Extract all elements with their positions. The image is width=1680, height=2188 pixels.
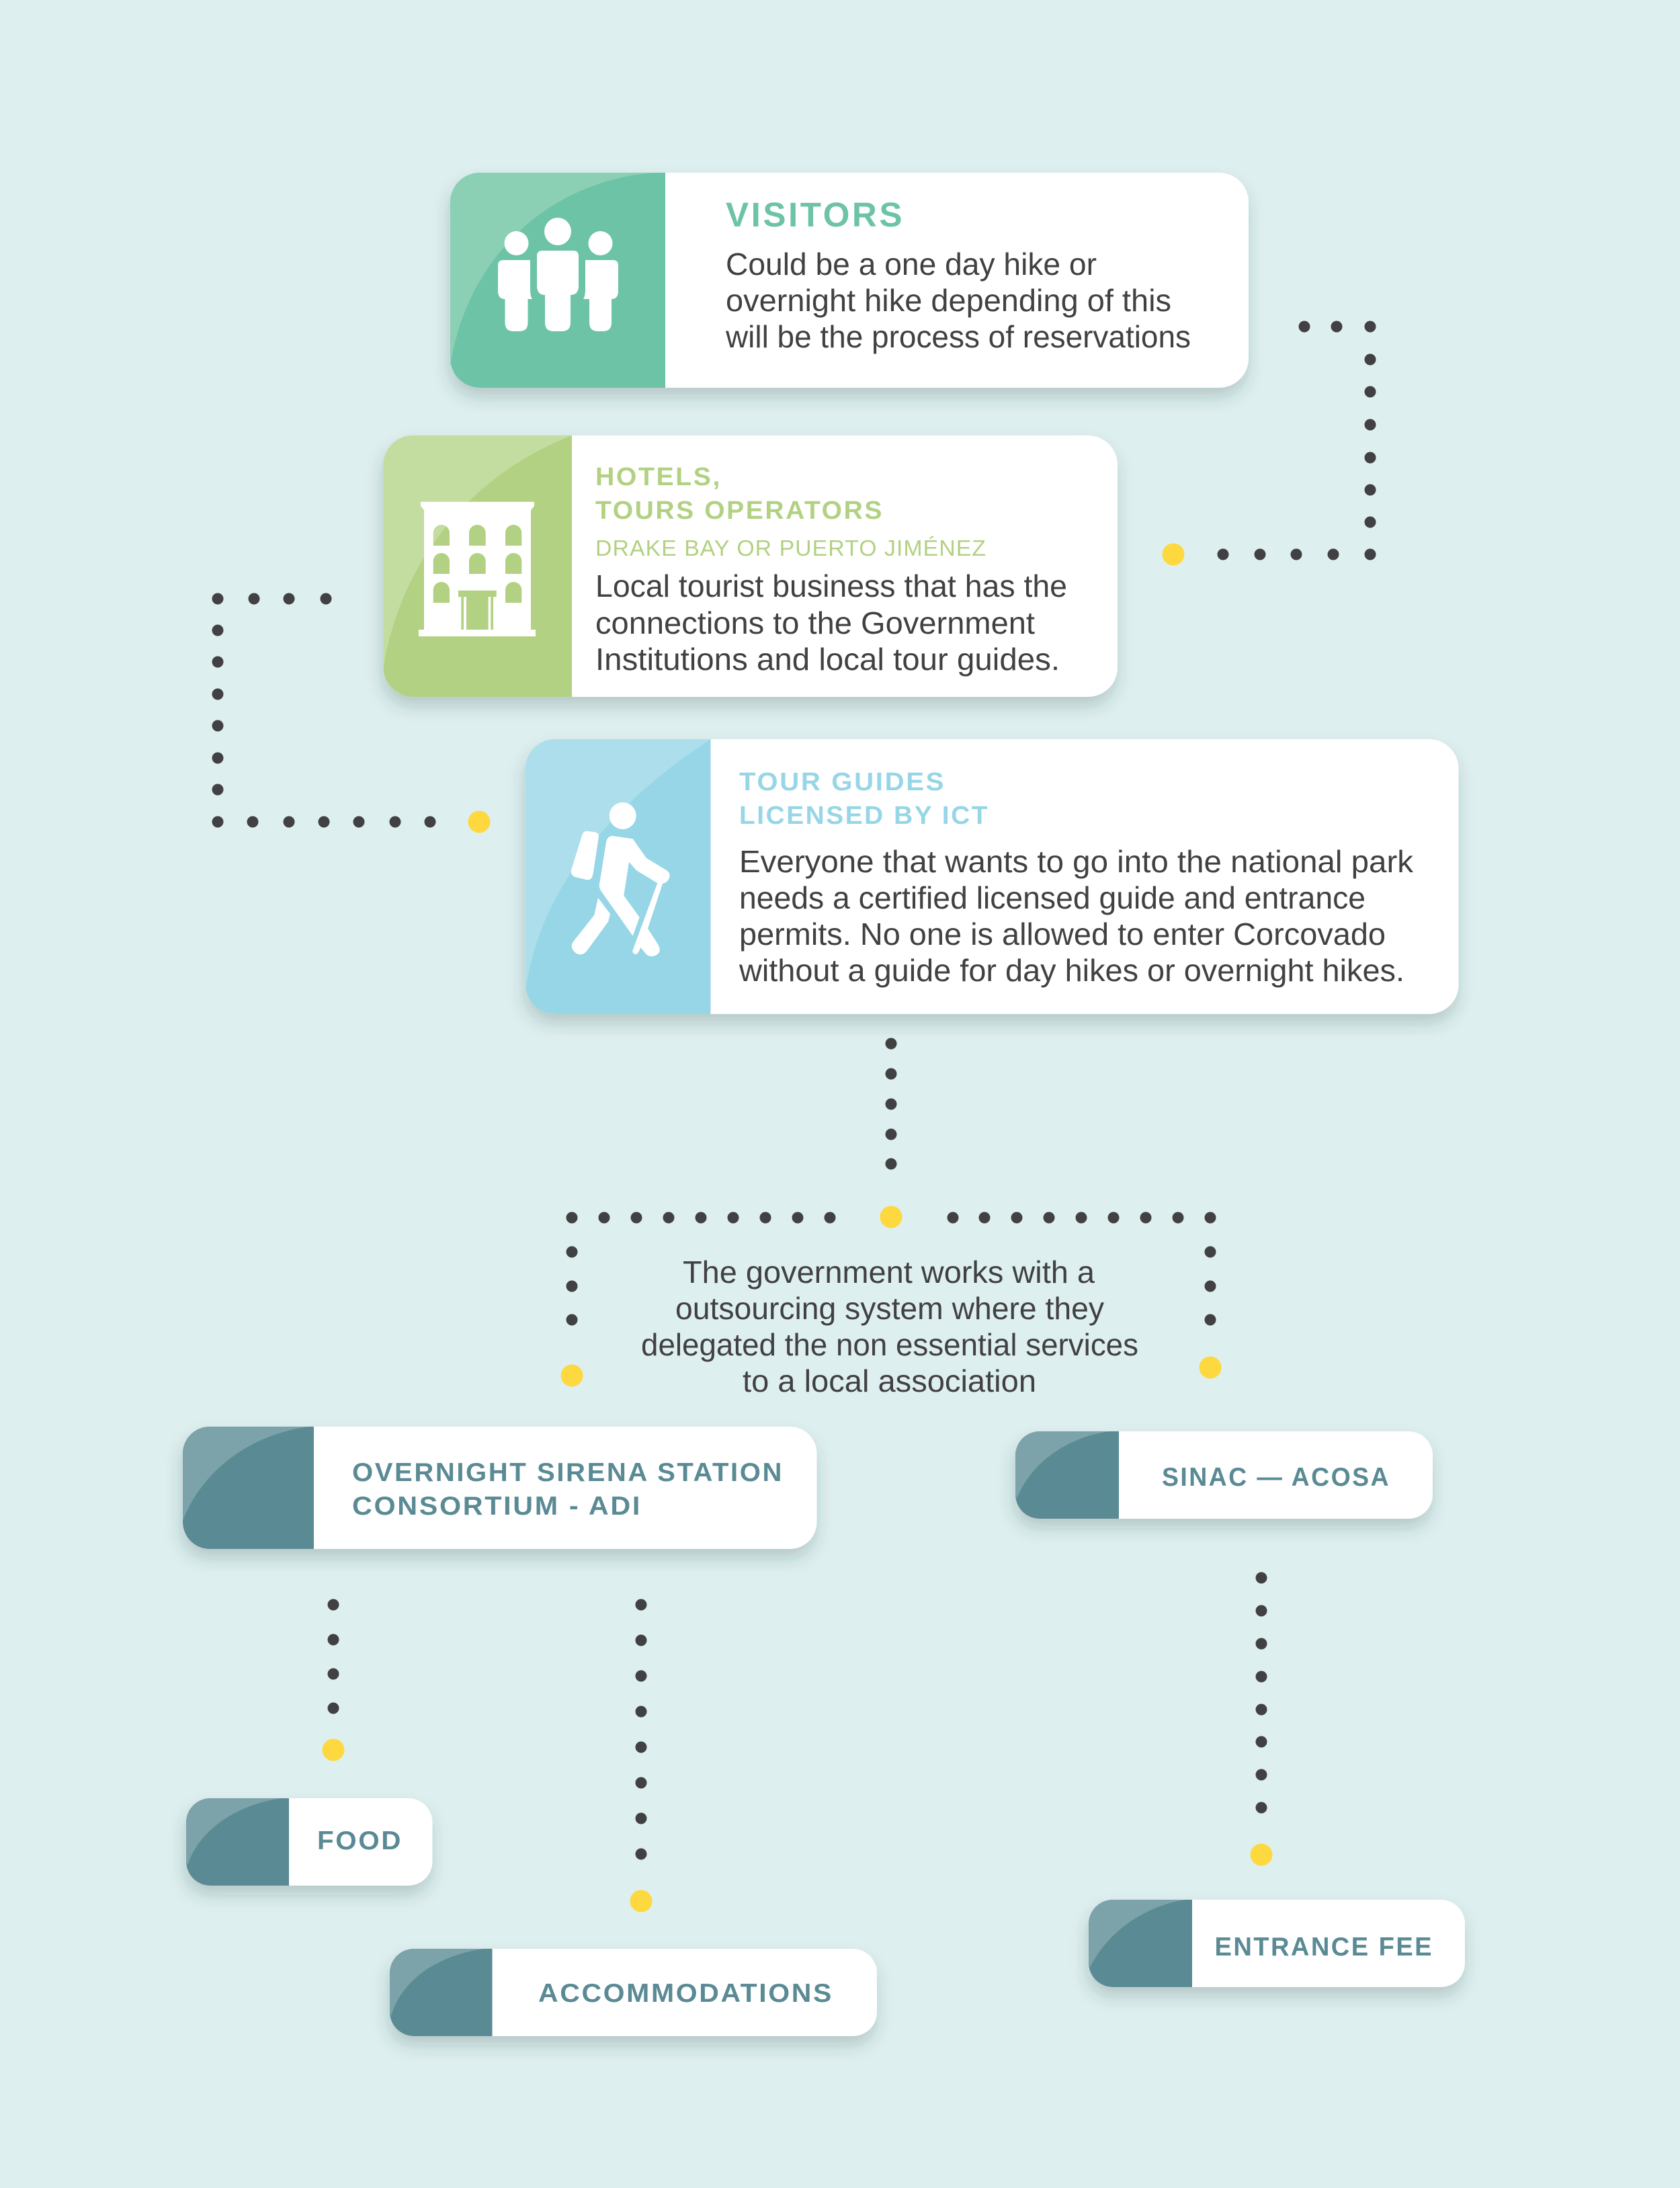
text: tour guides description: permits. No one is allowed to enter Corcovado <box>739 917 1386 952</box>
arrow: dotted path from hotels to tour guides <box>212 593 491 833</box>
text: government outsourcing note: outsourcing system where they <box>675 1291 1104 1326</box>
text: hotels description: Local tourist business that has the <box>595 569 1067 603</box>
heading: hotels, tours operators: TOURS OPERATORS <box>595 497 884 525</box>
arrow: dotted path left branch to consortium <box>560 1212 836 1387</box>
text: government outsourcing note: to a local association <box>743 1363 1036 1398</box>
arrow: dotted path consortium to accommodations <box>630 1599 652 1912</box>
arrow: dotted path right branch to SINAC <box>948 1212 1222 1379</box>
arrow: dotted path consortium to food <box>323 1599 344 1761</box>
heading: tour guides licensed by ICT: TOUR GUIDES <box>739 768 946 796</box>
heading: tour guides licensed by ICT: LICENSED BY ICT <box>739 802 989 830</box>
text: visitors description: Could be a one day hike or <box>726 247 1097 282</box>
panel: food <box>186 1798 433 1886</box>
text: visitors description <box>725 247 1191 354</box>
label: overnight Sirena station consortium ADI: CONSORTIUM - ADI <box>352 1492 642 1521</box>
panel: overnight Sirena station consortium <box>183 1427 817 1549</box>
label: overnight Sirena station consortium ADI: OVERNIGHT SIRENA STATION <box>352 1458 784 1487</box>
text: government outsourcing note <box>641 1255 1138 1398</box>
label: accommodations: ACCOMMODATIONS <box>538 1979 833 2008</box>
text: government outsourcing note: delegated the non essential services <box>641 1327 1138 1362</box>
text: hotels description: Institutions and local tour guides. <box>595 642 1060 677</box>
label: food: FOOD <box>317 1826 403 1855</box>
icon: hiker <box>571 802 670 956</box>
arrow: dotted path from visitors to hotels <box>1163 321 1376 566</box>
panel: entrance fee <box>1089 1900 1465 1987</box>
text: tour guides description: Everyone that wants to go into the national park <box>739 844 1414 879</box>
panel: hotels and tour operators <box>383 435 1118 697</box>
panel: visitors <box>450 173 1249 388</box>
text: visitors description: will be the process of reservations <box>725 319 1191 354</box>
panel: accommodations <box>390 1949 877 2036</box>
label: entrance fee: ENTRANCE FEE <box>1215 1933 1433 1962</box>
subheading: location: DRAKE BAY OR PUERTO JIMÉNEZ <box>595 536 986 560</box>
panel: tour guides <box>526 739 1458 1014</box>
icon: hotel building <box>419 502 536 636</box>
text: visitors description: overnight hike depending of this <box>726 283 1171 318</box>
text: government outsourcing note: The government works with a <box>683 1255 1095 1290</box>
text: tour guides description: without a guide for day hikes or overnight hikes. <box>739 953 1404 988</box>
heading: hotels, tours operators <box>595 463 884 525</box>
panel: SINAC ACOSA <box>1015 1431 1433 1519</box>
text: tour guides description <box>739 844 1414 988</box>
heading: visitors: VISITORS <box>726 196 905 234</box>
text: hotels description <box>595 569 1067 677</box>
arrow: dotted path from tour guides down to government note <box>880 1038 902 1228</box>
heading: hotels, tours operators: HOTELS, <box>595 463 722 491</box>
label: overnight Sirena station consortium ADI <box>352 1458 784 1521</box>
arrow: dotted path SINAC to entrance fee <box>1250 1572 1273 1865</box>
text: hotels description: connections to the Government <box>595 605 1035 640</box>
icon: visitors group <box>498 218 618 331</box>
heading: tour guides licensed by ICT <box>739 768 989 830</box>
label: SINAC ACOSA: SINAC — ACOSA <box>1162 1463 1390 1492</box>
text: tour guides description: needs a certified licensed guide and entrance <box>739 880 1366 915</box>
